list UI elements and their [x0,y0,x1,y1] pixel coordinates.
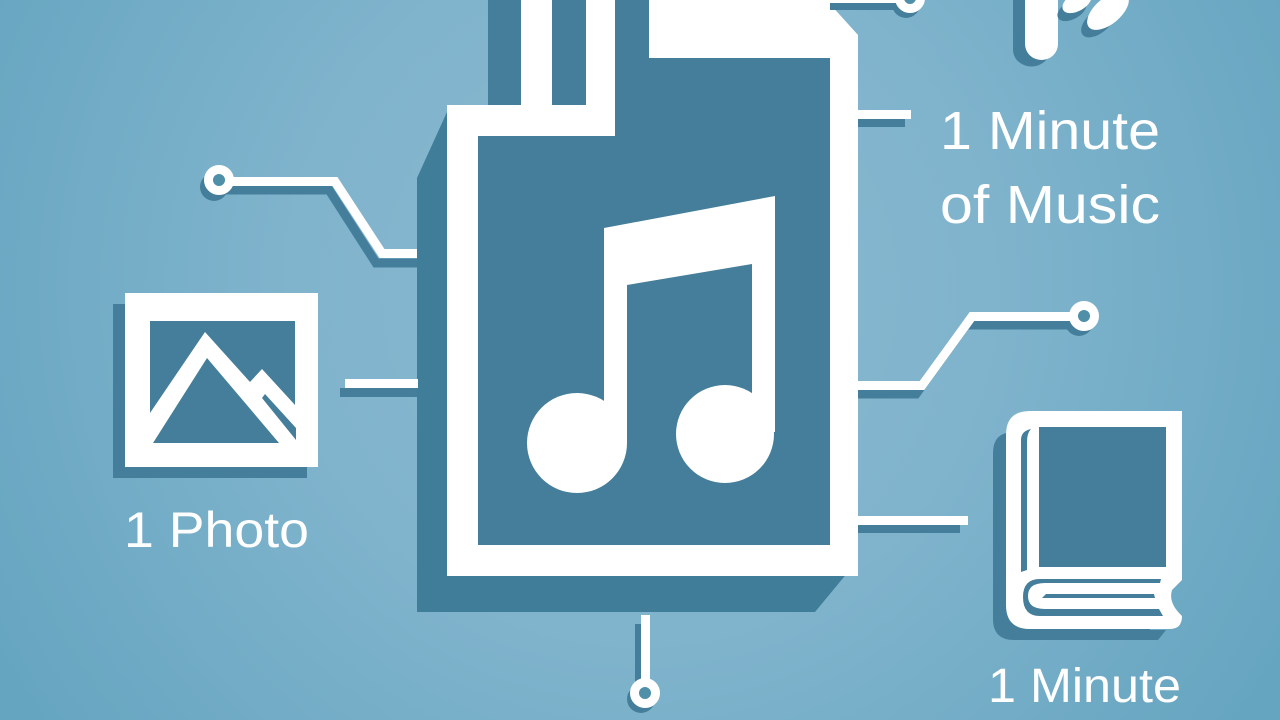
label: 1 Minute of Music [940,101,1160,235]
connector: bottom with node [627,615,656,713]
label: 1 Minute (lower): 1 Minute [988,660,1181,713]
book pages [1023,579,1163,616]
label: 1 Photo: 1 Photo [124,502,309,558]
icon: photo frame [113,293,318,478]
connector: lower right [858,516,968,533]
file drop shadow [417,112,858,612]
book cover [1006,411,1182,629]
label: 1 Minute of Music: of Music [940,175,1160,235]
central music file icon [417,0,858,612]
icon: book [993,411,1182,640]
icon: earbud with sound waves [1013,0,1136,66]
music note [527,196,775,493]
book front panel [1039,427,1166,567]
file white outline [447,0,858,576]
connector: left short [340,379,418,397]
connector: upper left with node [200,170,417,263]
book spine sliver [1021,429,1031,572]
book shadow [993,432,1166,640]
connector: top right [830,0,920,18]
top tab stripes [488,0,615,135]
connector: right with node [858,306,1094,394]
file inner panel [478,0,830,545]
label: 1 Minute of Music: 1 Minute [940,101,1160,161]
connector: upper right short [858,110,911,127]
